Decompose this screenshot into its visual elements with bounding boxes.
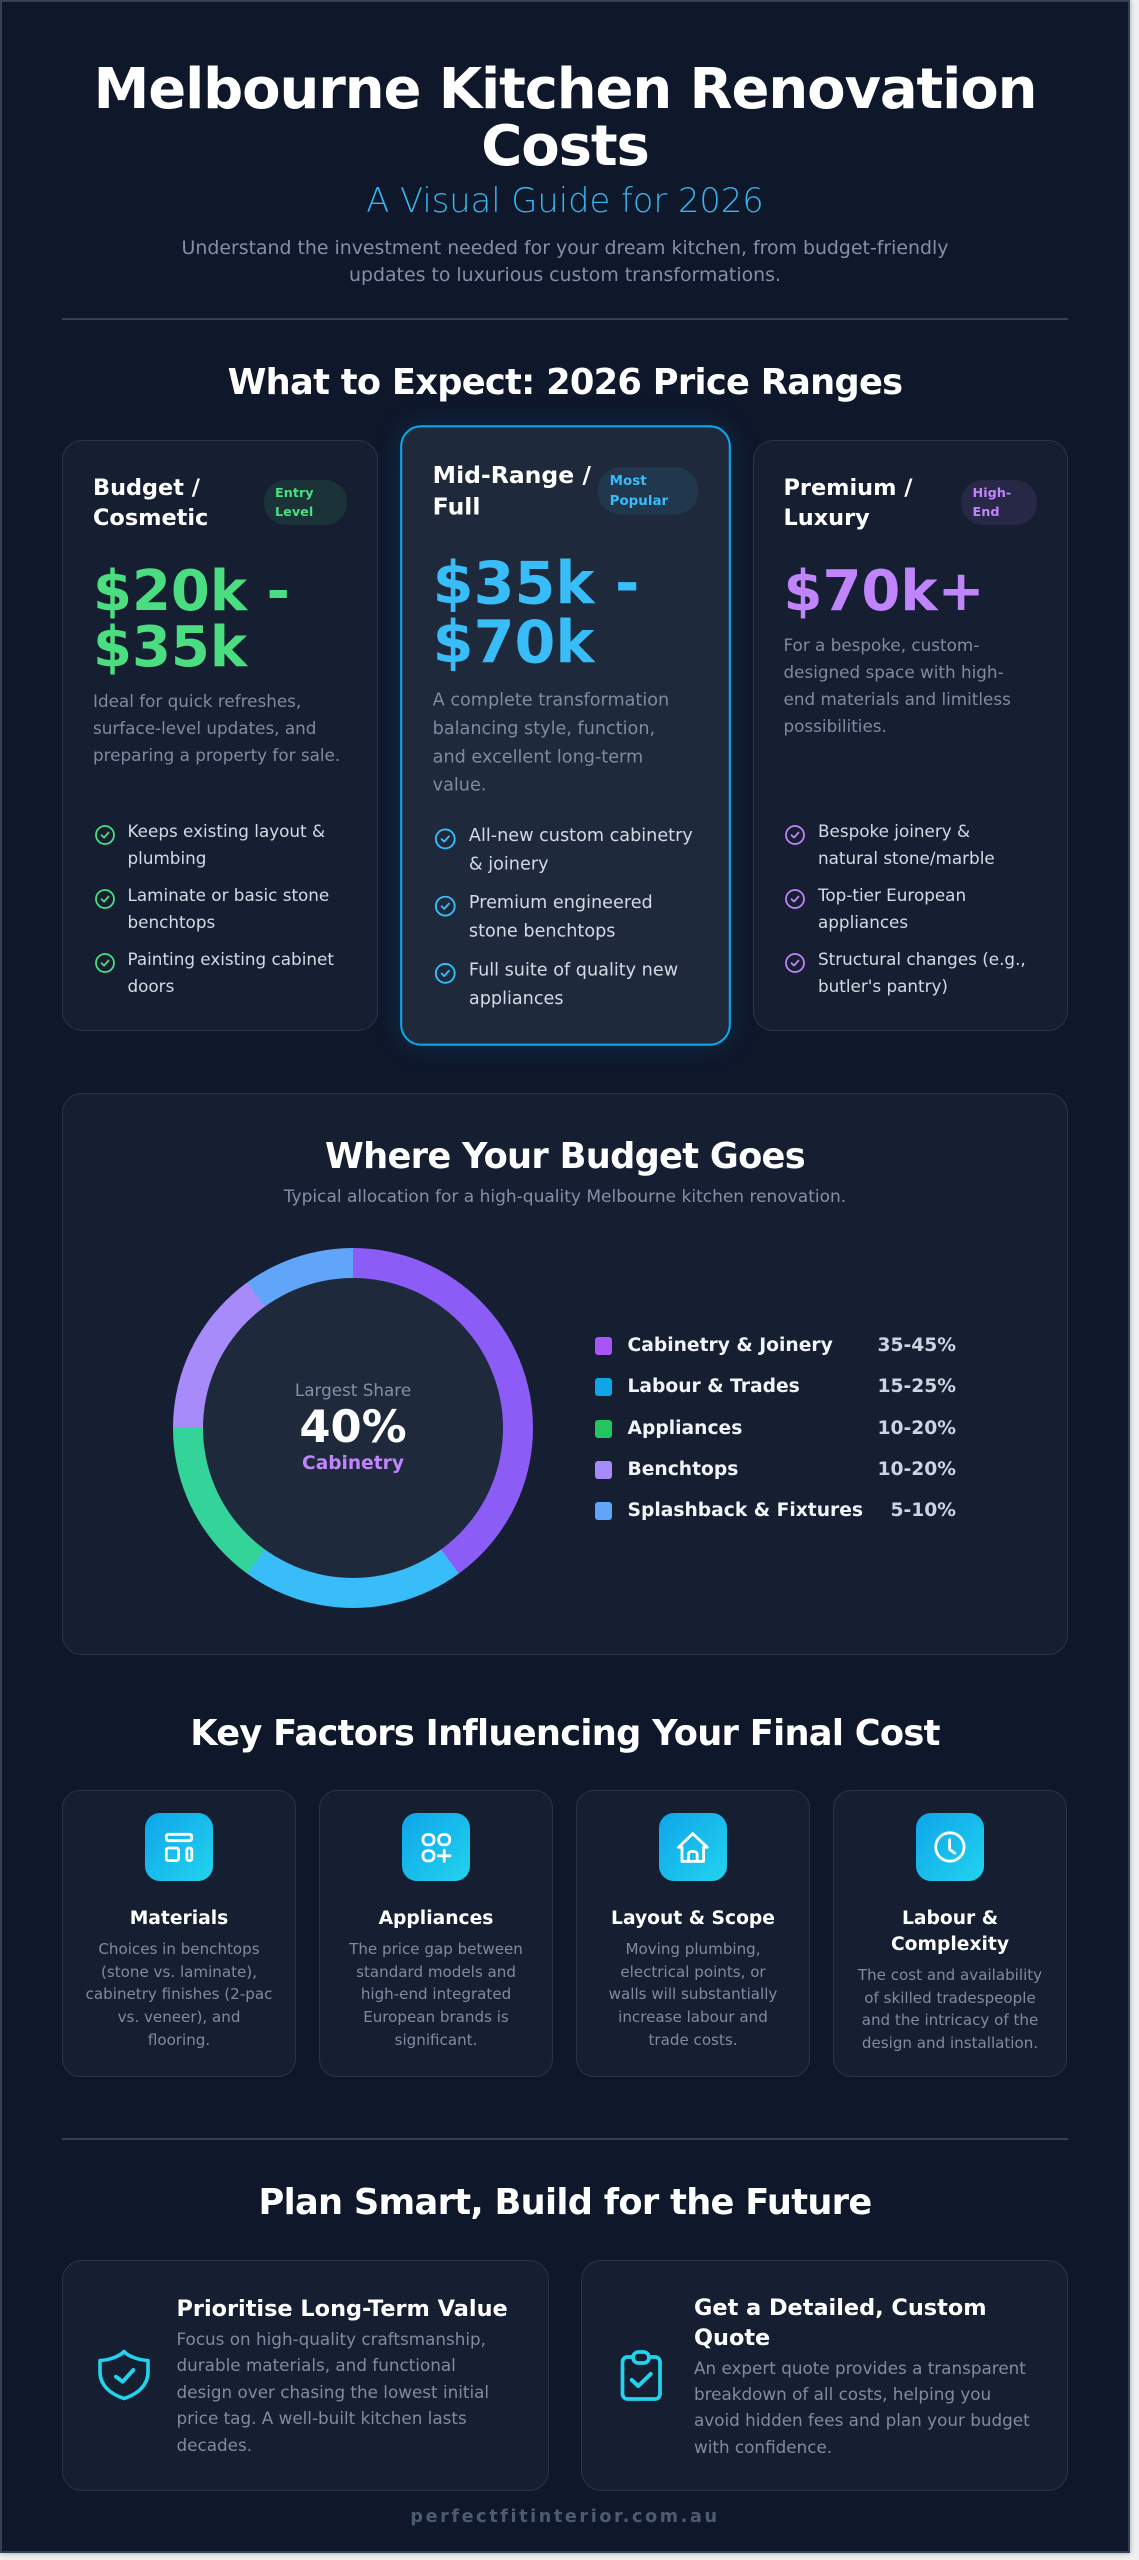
legend: splashback xyxy=(595,1500,956,1521)
legend: cabinetry: Cabinetry & Joinery xyxy=(628,1335,833,1356)
description: budget: preparing a property for sale. xyxy=(93,745,340,765)
icon: clock xyxy=(916,1813,984,1881)
tier name xyxy=(432,461,591,520)
badge: most popular: Popular xyxy=(609,493,668,509)
factor card: materials xyxy=(62,1790,296,2077)
title: Costs xyxy=(481,114,649,179)
legend: appliances: Appliances xyxy=(628,1418,742,1439)
feature xyxy=(95,821,325,868)
tier name: Mid-Range / xyxy=(432,461,590,489)
tip text: breakdown of all costs, helping you xyxy=(694,2384,991,2404)
intro text: updates to luxurious custom transformations. xyxy=(349,264,781,286)
feature: All-new custom cabinetry xyxy=(468,824,692,845)
factor card: layout and scope xyxy=(576,1790,810,2077)
factor text: cabinetry finishes (2-pac xyxy=(86,1985,272,2003)
factor text: (stone vs. laminate), xyxy=(101,1962,257,1980)
tip title: Get a Detailed, Custom xyxy=(694,2295,987,2321)
legend: cabinetry: 35-45% xyxy=(878,1335,956,1356)
tip title: Prioritise Long-Term Value xyxy=(176,2296,508,2322)
title xyxy=(94,57,1036,179)
description: mid-range: A complete transformation xyxy=(432,689,669,710)
subtitle: A Visual Guide for 2026 xyxy=(366,181,764,220)
tip text: price tag. A well-built kitchen lasts xyxy=(176,2408,467,2428)
description: premium: For a bespoke, custom- xyxy=(784,635,979,655)
feature xyxy=(434,824,692,873)
description: mid-range: balancing style, function, xyxy=(432,717,655,738)
description: premium: designed space with high- xyxy=(784,662,1004,682)
legend: appliances: 10-20% xyxy=(878,1418,956,1439)
feature: appliances xyxy=(818,912,908,932)
badge: most popular: Most xyxy=(609,473,646,489)
factor card: appliances xyxy=(319,1790,553,2077)
feature: Structural changes (e.g., xyxy=(818,949,1026,969)
price: premium: $70k+ xyxy=(784,558,985,624)
badge: high-end: End xyxy=(972,504,1000,520)
legend xyxy=(595,1335,956,1521)
card header: premium xyxy=(784,474,1037,530)
price: mid-range: $70k xyxy=(432,608,594,677)
badge: high-end: High- xyxy=(972,486,1011,500)
description: mid-range: and excellent long-term xyxy=(432,745,643,766)
description: premium: possibilities. xyxy=(784,716,887,736)
donut chart xyxy=(173,1248,533,1608)
feature xyxy=(95,885,329,932)
price: budget: $20k - xyxy=(93,558,290,624)
feature: & joinery xyxy=(468,852,548,873)
tier name xyxy=(784,474,912,530)
feature xyxy=(785,949,1026,996)
description: mid-range: value. xyxy=(432,773,486,794)
description: budget: surface-level updates, and xyxy=(93,718,316,738)
legend: benchtops xyxy=(595,1459,956,1480)
legend: splashback: Splashback & Fixtures xyxy=(628,1500,863,1521)
factor text: of skilled tradespeople xyxy=(864,1988,1036,2006)
tip text: Focus on high-quality craftsmanship, xyxy=(176,2329,486,2349)
feature: stone benchtops xyxy=(468,920,615,941)
footer website: perfectfitinterior.com.au xyxy=(410,2507,720,2527)
factor text: and the intricacy of the xyxy=(862,2011,1038,2029)
tip card: long-term value xyxy=(62,2260,549,2491)
tier name: Full xyxy=(432,493,480,520)
panel: mid-range tier xyxy=(400,425,730,1046)
factor title: Complexity xyxy=(891,1934,1009,1954)
legend: labour: Labour & Trades xyxy=(628,1376,800,1397)
feature list: mid-range xyxy=(434,824,692,1008)
factor text xyxy=(86,1940,272,2049)
factor text: The price gap between xyxy=(349,1940,523,1958)
feature: doors xyxy=(128,976,174,996)
feature: natural stone/marble xyxy=(818,848,995,868)
tip text: An expert quote provides a transparent xyxy=(694,2358,1026,2378)
heading: budget: Where Your Budget Goes xyxy=(325,1136,805,1177)
factor title: Materials xyxy=(130,1908,228,1928)
heading: key factors: Key Factors Influencing Your Final Cost xyxy=(190,1713,940,1754)
description: budget: Ideal for quick refreshes, xyxy=(93,691,301,711)
description: premium: end materials and limitless xyxy=(784,689,1011,709)
badge: most popular xyxy=(597,467,698,514)
tip title: Quote xyxy=(694,2325,770,2351)
factor card: labour xyxy=(833,1790,1067,2077)
factor title xyxy=(891,1908,1009,1954)
feature xyxy=(785,885,966,932)
factor text xyxy=(609,1940,777,2049)
feature: Laminate or basic stone xyxy=(128,885,329,905)
price: mid-range xyxy=(432,550,639,677)
feature: appliances xyxy=(468,987,563,1008)
feature: Painting existing cabinet xyxy=(128,949,334,969)
factor text: European brands is xyxy=(363,2008,509,2026)
intro text: Understand the investment needed for your dream kitchen, from budget-friendly xyxy=(182,237,948,259)
feature xyxy=(434,892,652,941)
factor text: significant. xyxy=(395,2031,477,2049)
feature xyxy=(95,949,334,996)
icon: shield xyxy=(98,2350,150,2400)
factor text: Choices in benchtops xyxy=(98,1940,260,1958)
description: premium xyxy=(784,635,1011,736)
feature xyxy=(434,959,678,1008)
centre category: Cabinetry xyxy=(302,1452,404,1474)
factor text: Moving plumbing, xyxy=(625,1940,761,1958)
factor text: high-end integrated xyxy=(361,1985,511,2003)
feature: Full suite of quality new xyxy=(468,959,678,980)
icon: clipboard xyxy=(620,2350,662,2401)
price: mid-range: $35k - xyxy=(432,550,639,618)
tip text: durable materials, and functional xyxy=(176,2355,456,2375)
legend: labour: 15-25% xyxy=(878,1376,956,1397)
feature: Top-tier European xyxy=(818,885,966,905)
price: budget xyxy=(93,558,290,680)
tip title xyxy=(694,2295,987,2351)
factor text: The cost and availability xyxy=(858,1966,1042,1984)
factor text xyxy=(349,1940,523,2049)
tier name: Luxury xyxy=(784,504,870,530)
tier name: Premium / xyxy=(784,474,912,500)
badge: entry level xyxy=(264,480,346,525)
tier name xyxy=(93,474,208,530)
factor text: electrical points, or xyxy=(620,1962,766,1980)
feature: plumbing xyxy=(128,848,206,868)
panel: where your budget goes xyxy=(62,1093,1068,1655)
badge: entry level: Entry xyxy=(275,486,314,500)
tip text: avoid hidden fees and plan your budget xyxy=(694,2410,1030,2430)
badge: entry level: Level xyxy=(275,504,313,520)
feature list: premium xyxy=(785,821,1026,996)
icon: house xyxy=(659,1813,727,1881)
factor title: Appliances xyxy=(379,1908,493,1928)
heading: plan smart: Plan Smart, Build for the Future xyxy=(259,2182,871,2223)
donut centre xyxy=(203,1278,503,1578)
centre label: Largest Share xyxy=(295,1380,411,1400)
factor text: increase labour and xyxy=(618,2008,768,2026)
legend: benchtops: 10-20% xyxy=(878,1459,956,1480)
factor text: flooring. xyxy=(148,2031,210,2049)
tier name: Budget / xyxy=(93,474,200,500)
feature: butler's pantry) xyxy=(818,976,948,996)
icon: layout xyxy=(145,1813,213,1881)
feature: benchtops xyxy=(128,912,215,932)
factor title: Labour & xyxy=(902,1908,998,1928)
icon: apps xyxy=(402,1813,470,1881)
title: Melbourne Kitchen Renovation xyxy=(94,57,1036,122)
legend: benchtops: Benchtops xyxy=(628,1459,738,1480)
feature: Keeps existing layout & xyxy=(128,821,325,841)
feature: Premium engineered xyxy=(468,892,652,913)
tip text: design over chasing the lowest initial xyxy=(176,2382,489,2402)
panel: budget tier xyxy=(62,440,378,1031)
centre value: 40% xyxy=(299,1400,407,1452)
factor text xyxy=(858,1966,1042,2052)
legend: cabinetry xyxy=(595,1335,956,1356)
card header: budget xyxy=(93,474,347,530)
factor text: trade costs. xyxy=(648,2031,738,2049)
tip text: with confidence. xyxy=(694,2437,832,2457)
feature: Bespoke joinery & xyxy=(818,821,970,841)
description: budget xyxy=(93,691,340,765)
panel subheading: Typical allocation for a high-quality Melbourne kitchen renovation. xyxy=(284,1187,846,1207)
feature xyxy=(785,821,995,868)
factor text: standard models and xyxy=(356,1962,516,1980)
tip text: decades. xyxy=(176,2435,252,2455)
intro text xyxy=(182,237,948,286)
tip text xyxy=(176,2329,489,2455)
factor title: Layout & Scope xyxy=(611,1908,775,1928)
tip text xyxy=(694,2354,1030,2460)
price: budget: $35k xyxy=(93,614,247,680)
factor text: walls will substantially xyxy=(609,1985,777,2003)
legend: labour xyxy=(595,1376,956,1397)
feature list: budget xyxy=(95,821,334,996)
card header: mid-range xyxy=(432,461,698,520)
tip card: custom quote xyxy=(580,2260,1068,2491)
heading: price ranges: What to Expect: 2026 Price Ranges xyxy=(228,362,902,403)
badge: high-end xyxy=(961,480,1037,525)
factor text: design and installation. xyxy=(862,2034,1038,2052)
panel: premium tier xyxy=(752,440,1068,1031)
tier name: Cosmetic xyxy=(93,504,208,530)
legend: splashback: 5-10% xyxy=(890,1500,956,1521)
factor text: vs. veneer), and xyxy=(118,2008,240,2026)
legend: appliances xyxy=(595,1418,956,1439)
description: mid-range xyxy=(432,689,669,794)
